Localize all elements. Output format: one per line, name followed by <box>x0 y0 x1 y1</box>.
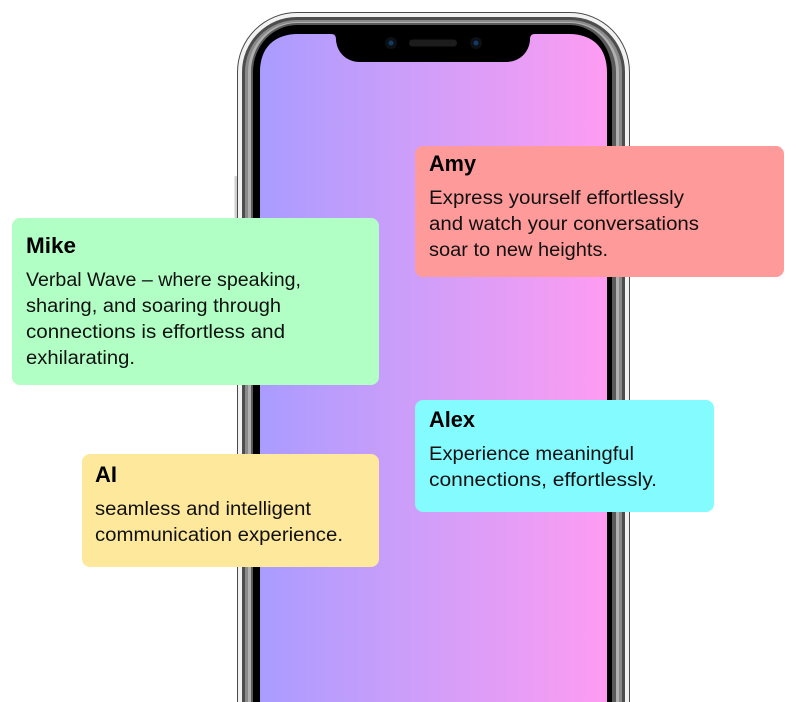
text: Amy message: Express yourself effortlessly <box>429 188 685 209</box>
phone frame <box>234 12 630 702</box>
text: Mike message: sharing, and soaring through <box>26 296 281 317</box>
heading: Amy: Amy <box>429 151 477 176</box>
text: Alex message: Experience meaningful <box>429 444 634 465</box>
text: Mike message: exhilarating. <box>26 348 135 369</box>
text: Alex message <box>429 444 657 491</box>
text: AI message <box>95 499 343 546</box>
text: AI message: seamless and intelligent <box>95 499 312 520</box>
front camera left <box>385 37 397 49</box>
panel: AI <box>82 454 379 567</box>
text: Amy message: and watch your conversations <box>429 214 699 235</box>
phone screen <box>260 34 607 702</box>
text: Alex message: connections, effortlessly. <box>429 470 657 491</box>
text: Mike message <box>26 270 301 369</box>
text: Amy message <box>429 188 699 261</box>
heading: Mike: Mike <box>26 233 76 258</box>
text: Amy message: soar to new heights. <box>429 240 608 261</box>
front camera right <box>470 37 482 49</box>
text: AI message: communication experience. <box>95 525 343 546</box>
panel: Mike <box>12 218 379 385</box>
speaker <box>409 40 457 46</box>
panel: Alex <box>415 400 714 512</box>
phone <box>234 12 630 702</box>
text: Mike message: connections is effortless and <box>26 322 285 343</box>
heading: Alex: Alex <box>429 407 476 432</box>
text: Mike message: Verbal Wave – where speaking, <box>26 270 301 291</box>
panel: Amy <box>415 146 784 277</box>
heading: AI: AI <box>95 462 117 487</box>
